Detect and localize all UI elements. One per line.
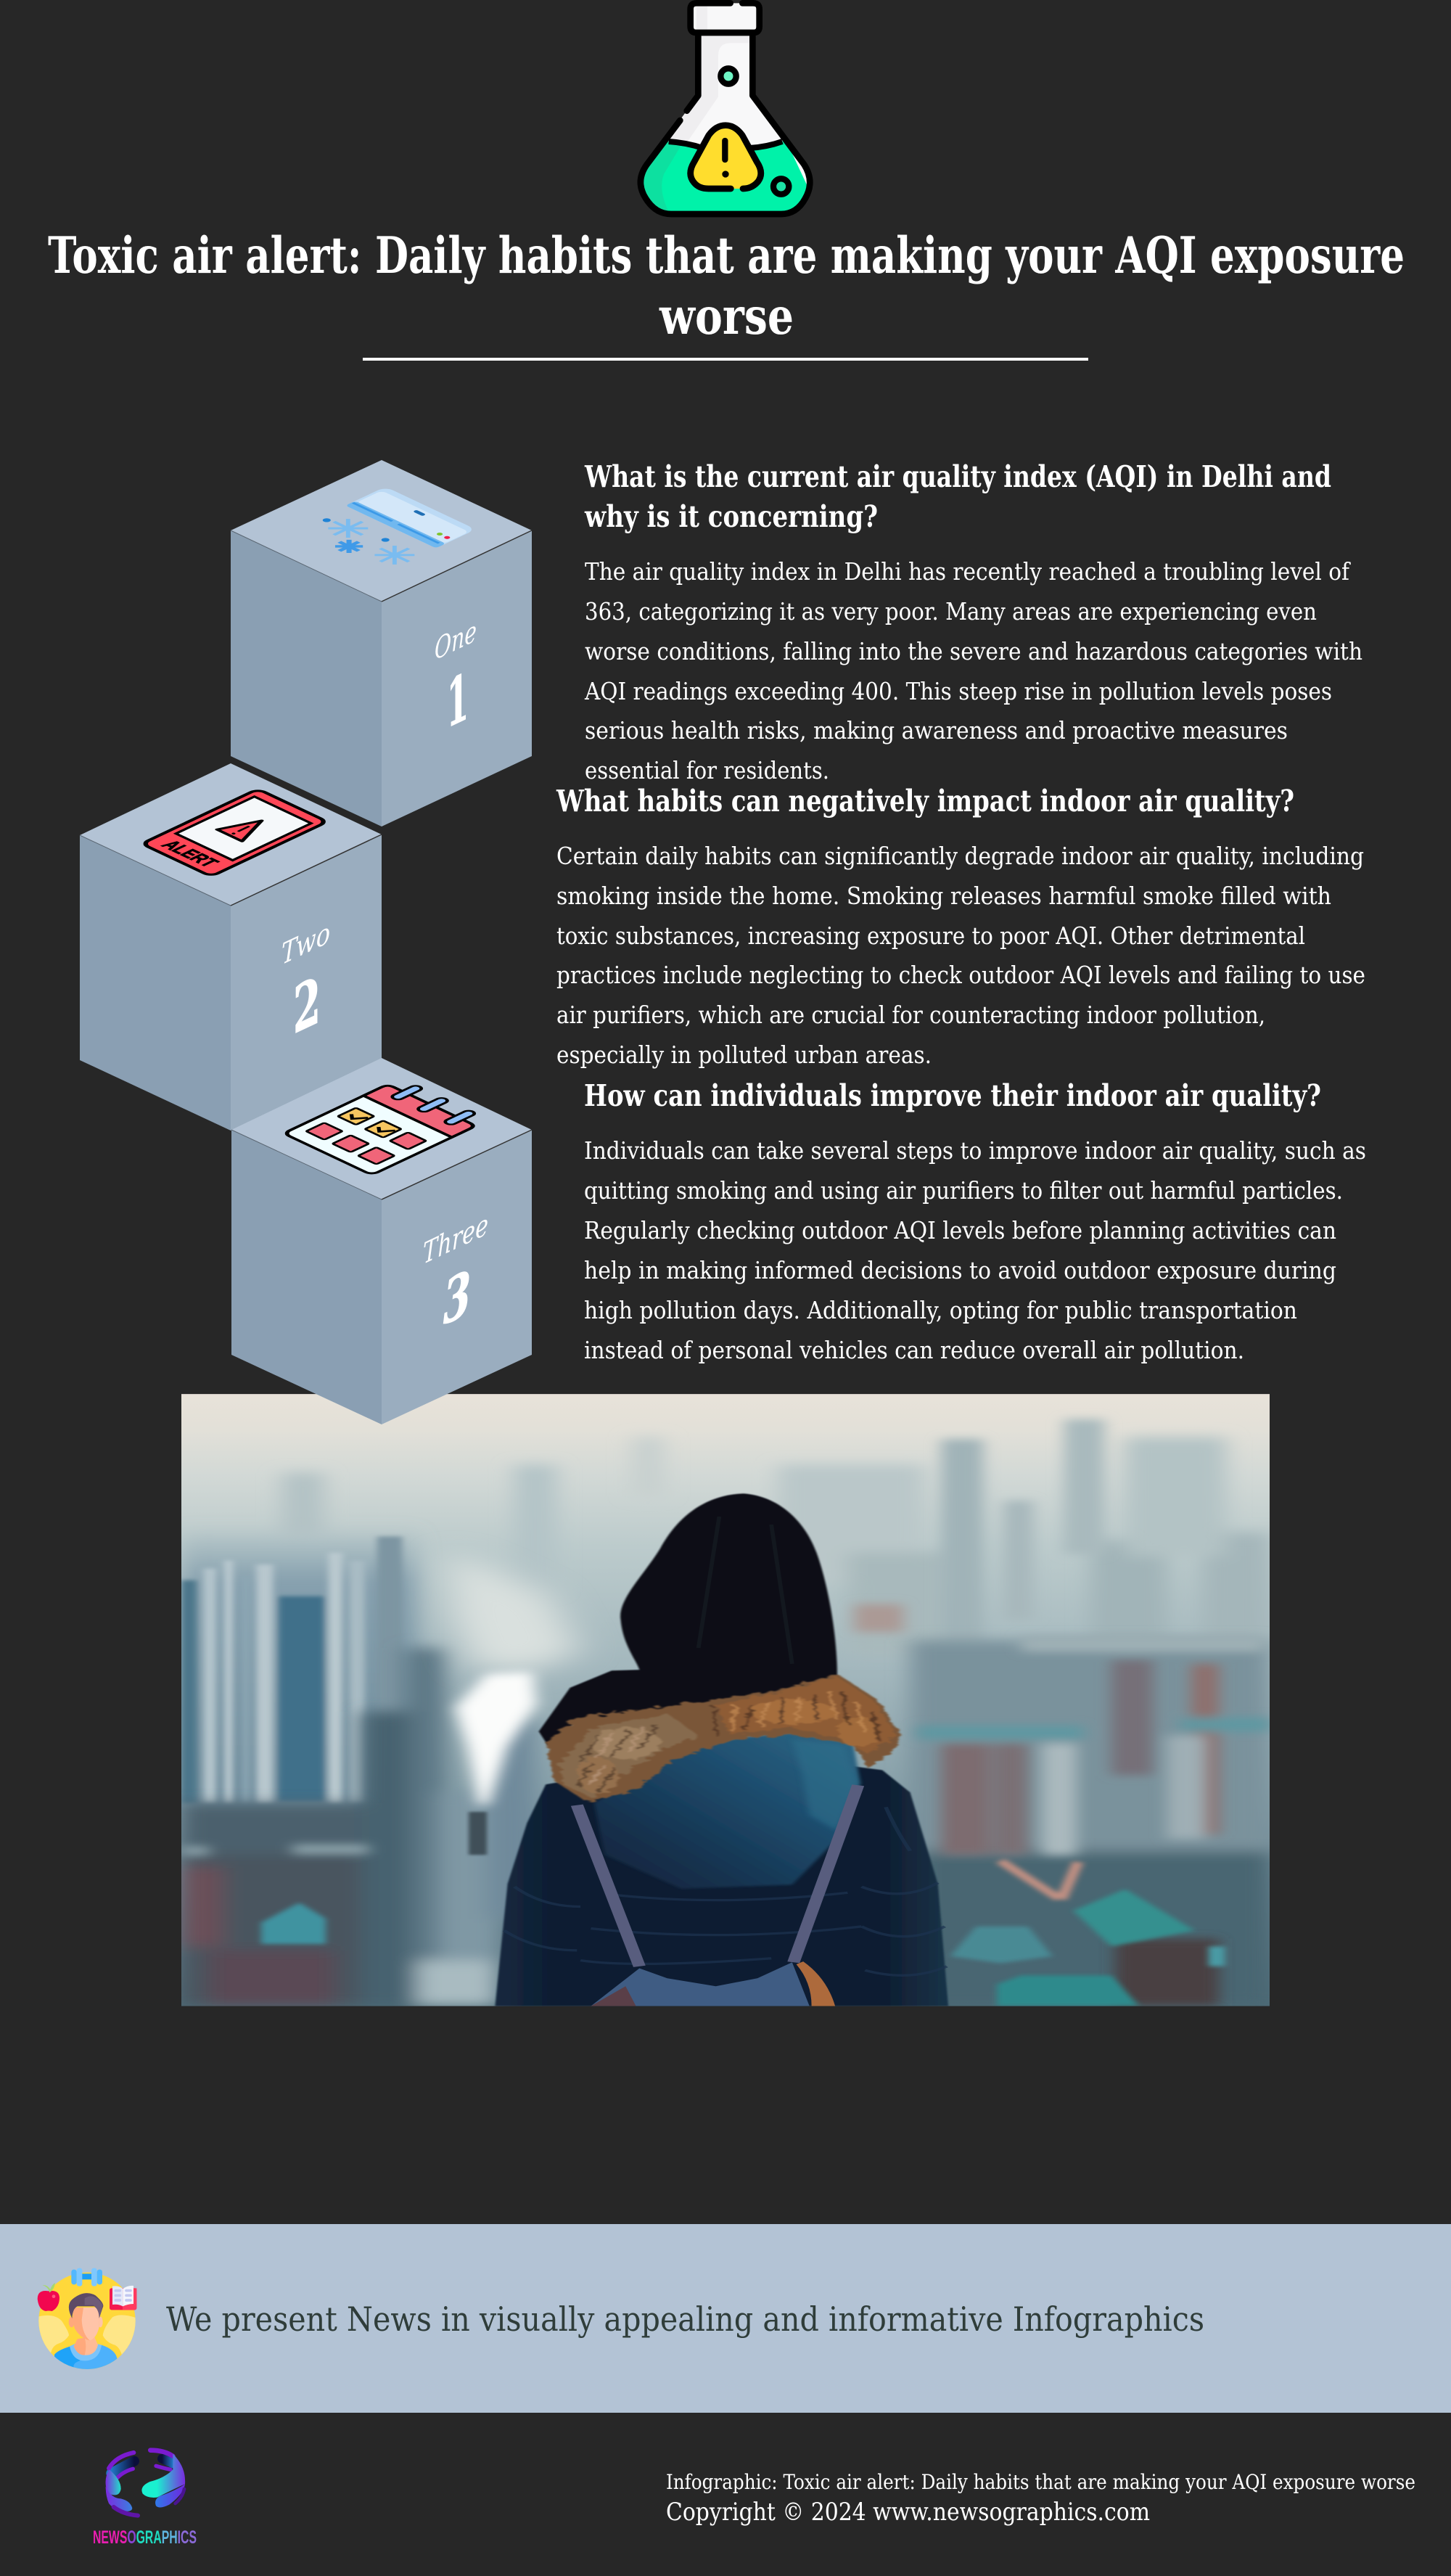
hood bbox=[594, 1732, 860, 1889]
icon: air conditioner with snowflakes bbox=[295, 487, 477, 573]
body text: help in making informed decisions to avoid outdoor exposure during bbox=[584, 1256, 1336, 1284]
text block: current AQI in Delhi bbox=[584, 459, 1362, 784]
heading: How can individuals improve their indoor air quality? bbox=[584, 1078, 1321, 1113]
body text: The air quality index in Delhi has recently reached a troubling level of bbox=[585, 557, 1351, 586]
footer credits: Copyright © 2024 www.newsographics.com bbox=[666, 2498, 1150, 2527]
body text: AQI readings exceeding 400. This steep rise in pollution levels poses bbox=[584, 677, 1332, 705]
icon: person with apple, dumbbell and book bbox=[36, 2268, 138, 2371]
body text: worse conditions, falling into the severe and hazardous categories with bbox=[585, 637, 1362, 665]
backpack straps bbox=[577, 1785, 858, 1966]
title: worse bbox=[659, 287, 794, 346]
jacket body bbox=[495, 1752, 948, 2006]
body text: especially in polluted urban areas. bbox=[556, 1041, 932, 1069]
label: Three: Three bbox=[423, 1207, 488, 1271]
backpack bbox=[591, 1962, 810, 2006]
body text: essential for residents. bbox=[585, 756, 829, 784]
label: One: One bbox=[435, 613, 477, 667]
step cube 2 bbox=[80, 763, 382, 1131]
hair bbox=[539, 1493, 837, 1745]
body text: Regularly checking outdoor AQI levels before planning activities can bbox=[584, 1216, 1336, 1244]
body text bbox=[584, 1136, 1366, 1364]
icon: alert sign bbox=[141, 789, 327, 877]
footer credits bbox=[666, 2470, 1415, 2527]
body text: instead of personal vehicles can reduce overall air pollution. bbox=[584, 1336, 1244, 1364]
step cube 1 bbox=[231, 460, 532, 826]
photo: woman in puffer jacket overlooking smoggy city bbox=[181, 1393, 1270, 2006]
icon: warning flask bbox=[629, 3, 822, 218]
body text: toxic substances, increasing exposure to poor AQI. Other detrimental bbox=[556, 922, 1305, 950]
body text: 363, categorizing it as very poor. Many areas are experiencing even bbox=[585, 597, 1317, 625]
text block: habits impacting indoor air bbox=[556, 784, 1365, 1069]
step cube 3 bbox=[231, 1058, 532, 1424]
icon: calendar bbox=[284, 1078, 490, 1175]
heading: What habits can negatively impact indoor air quality? bbox=[556, 784, 1294, 819]
body text: air purifiers, which are crucial for counteracting indoor pollution, bbox=[556, 1001, 1265, 1029]
body text: Certain daily habits can significantly degrade indoor air quality, including bbox=[556, 842, 1364, 870]
body text: serious health risks, making awareness and proactive measures bbox=[585, 716, 1288, 745]
body text: high pollution days. Additionally, opting for public transportation bbox=[584, 1296, 1297, 1324]
body text: smoking inside the home. Smoking releases harmful smoke filled with bbox=[556, 882, 1331, 910]
tagline: We present News in visually appealing and informative Infographics bbox=[166, 2300, 1204, 2339]
heading bbox=[584, 459, 1331, 534]
body text bbox=[584, 557, 1362, 784]
icon: alert sign: ALERT bbox=[157, 838, 223, 869]
body text: quitting smoking and using air purifiers to filter out harmful particles. bbox=[584, 1176, 1343, 1205]
chimney bbox=[469, 1812, 487, 1855]
logo: Newsographics bbox=[106, 2450, 185, 2516]
body text bbox=[556, 842, 1365, 1069]
text block: improving indoor air bbox=[584, 1078, 1366, 1364]
title bbox=[48, 226, 1405, 346]
label: Two: Two bbox=[281, 915, 330, 972]
tagline band bbox=[0, 2224, 1451, 2413]
step cube 1: 1 bbox=[447, 657, 469, 743]
body text: Individuals can take several steps to improve indoor air quality, such as bbox=[584, 1136, 1366, 1165]
heading: why is it concerning? bbox=[584, 499, 878, 534]
fur collar bbox=[546, 1674, 902, 1802]
logo wordmark: NEWSOGRAPHICS bbox=[93, 2527, 197, 2548]
body text: practices include neglecting to check outdoor AQI levels and failing to use bbox=[556, 961, 1365, 989]
number: 3: 3 bbox=[443, 1257, 471, 1340]
title underline bbox=[363, 358, 1088, 361]
number: 2: 2 bbox=[293, 961, 321, 1049]
